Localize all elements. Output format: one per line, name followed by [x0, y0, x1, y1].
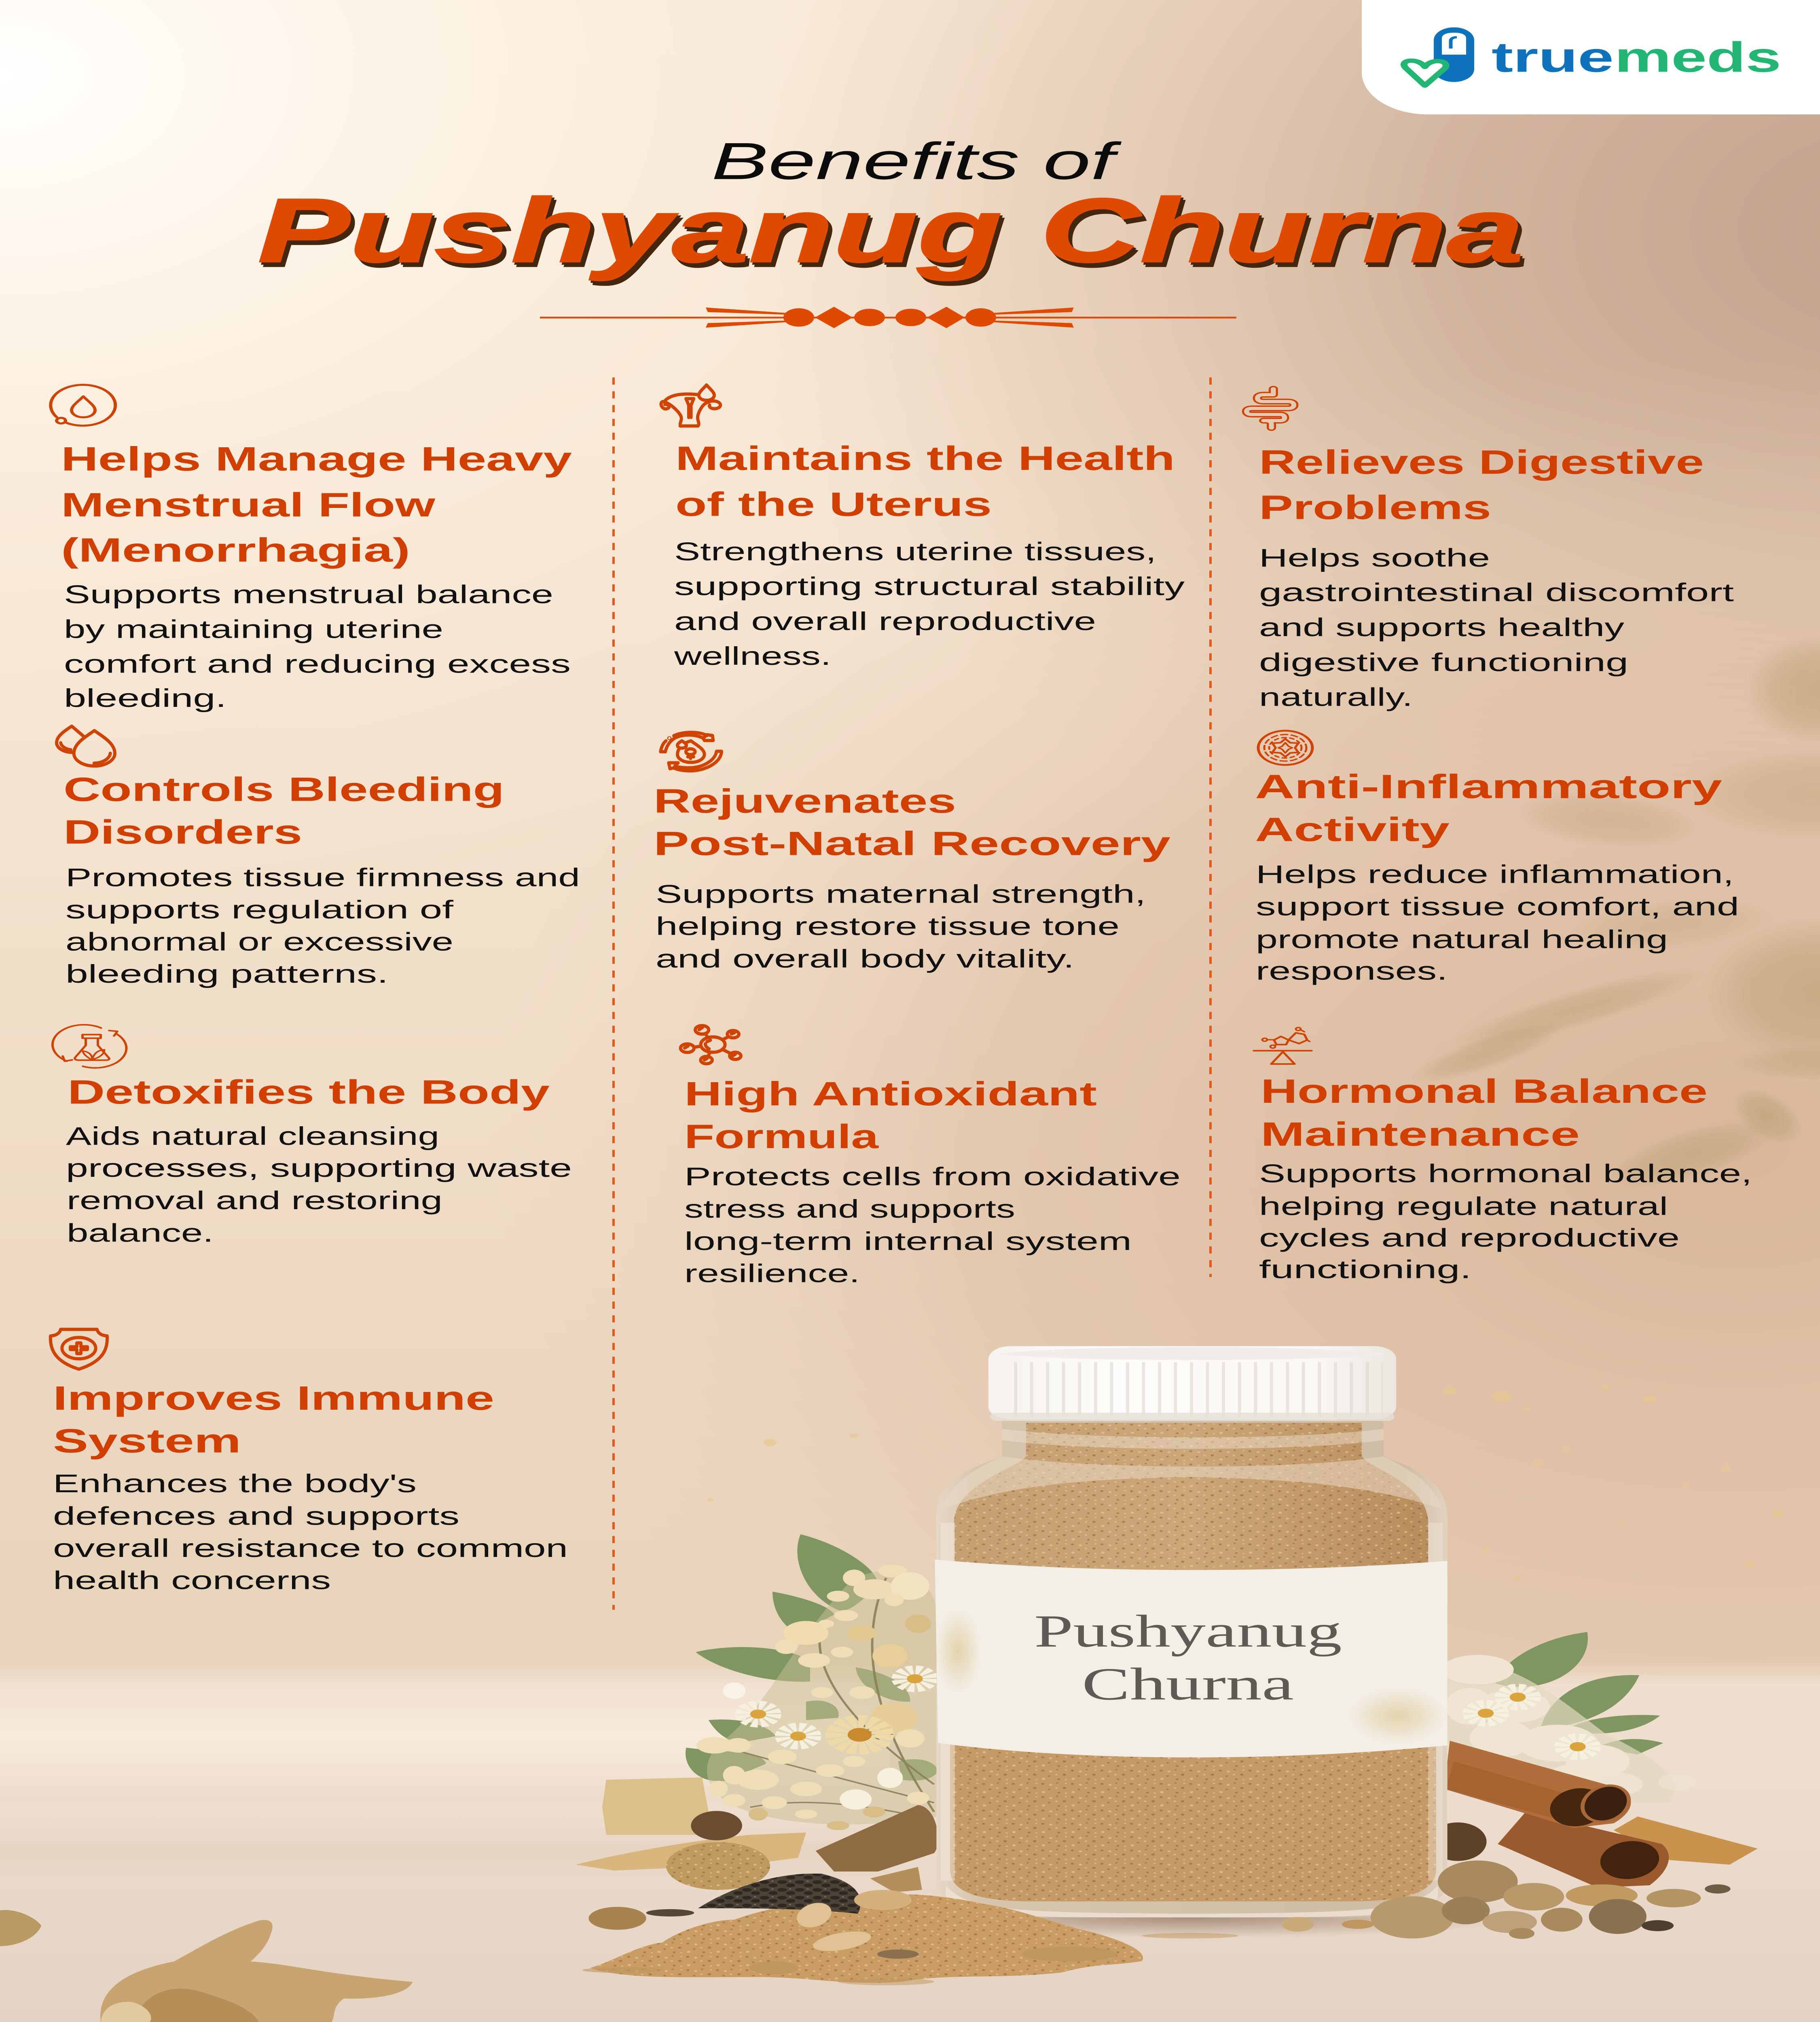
powder pile: [590, 1894, 1143, 1983]
product still life: [576, 1346, 1784, 1985]
icon: shield with cross: [51, 1329, 107, 1369]
text block: removal and restoring: [67, 1186, 442, 1214]
panel: Anti-Inflammatory Activity: [1255, 731, 1739, 985]
heading: [53, 1379, 494, 1460]
right bouquet: [1442, 1632, 1697, 1803]
text block: balance.: [67, 1218, 214, 1247]
text block: helping regulate natural: [1259, 1192, 1668, 1220]
upper powder: [954, 1423, 1428, 1578]
icon: mandala: [1258, 731, 1312, 765]
icon: intestines: [1246, 389, 1294, 428]
main title: Pushyanug Churna: [258, 180, 1524, 282]
column divider left: [612, 377, 615, 1610]
jar label text: Pushyanug: [1034, 1605, 1342, 1657]
icon: two drops: [57, 726, 115, 766]
icon: flask with leaf and arrows: [53, 1025, 126, 1068]
heading: [1255, 768, 1722, 848]
text block: and supports healthy: [1259, 613, 1624, 642]
text block: stress and supports: [684, 1195, 1015, 1223]
text block: defences and supports: [53, 1502, 459, 1530]
text block: Enhances the body's: [53, 1469, 417, 1498]
heading: [654, 783, 1170, 863]
panel: High Antioxidant Formula: [681, 1026, 1181, 1288]
text block: digestive functioning: [1259, 648, 1628, 677]
text block: support tissue comfort, and: [1256, 892, 1739, 921]
left bouquet: [686, 1534, 938, 1830]
wordmark: true: [1492, 34, 1614, 81]
heading: Helps Manage Heavy: [61, 440, 572, 478]
heading: Hormonal Balance: [1261, 1072, 1708, 1110]
text block: and overall reproductive: [674, 607, 1096, 636]
text block: abnormal or excessive: [66, 927, 453, 956]
heading: Improves Immune: [53, 1379, 494, 1417]
lower powder: [950, 1743, 1436, 1901]
heading: Activity: [1255, 811, 1450, 848]
panel: Relieves Digestive Problems: [1246, 389, 1734, 711]
glass highlights: [942, 1456, 1442, 1509]
scattered powder crumbs: [582, 1920, 1374, 1985]
text block: [1259, 543, 1734, 711]
icon: cycle with drop and female symbol: [660, 732, 722, 771]
main title: Pushyanug Churna: [260, 182, 1526, 284]
panel: Rejuvenates Post-Natal Recovery: [654, 732, 1170, 973]
text block: naturally.: [1259, 683, 1413, 711]
heading: Rejuvenates: [654, 783, 956, 820]
text block: Promotes tissue firmness and: [66, 863, 580, 892]
black seeds: [698, 1874, 861, 1914]
icon: molecule on balance: [1254, 1028, 1312, 1064]
glass jar: [935, 1346, 1448, 1917]
logo panel: [1362, 0, 1820, 114]
panel: Hormonal Balance Maintenance: [1254, 1028, 1752, 1284]
heading: [684, 1075, 1097, 1155]
heading: (Menorrhagia): [61, 531, 410, 569]
panel: Detoxifies the Body: [53, 1025, 572, 1247]
lid: [988, 1346, 1396, 1421]
text block: cycles and reproductive: [1259, 1223, 1680, 1252]
text block: Helps soothe: [1259, 543, 1490, 572]
text block: and overall body vitality.: [656, 944, 1074, 973]
wordmark: [1492, 34, 1781, 81]
jar shadow: [854, 1897, 1526, 1938]
text block: Supports maternal strength,: [656, 880, 1146, 908]
subtitle: Benefits of: [711, 132, 1122, 190]
left roots: [576, 1777, 938, 1892]
text block: Supports hormonal balance,: [1259, 1159, 1752, 1188]
front pieces right: [1282, 1861, 1731, 1939]
text block: [684, 1162, 1181, 1288]
heading: [61, 440, 572, 569]
text block: supporting structural stability: [674, 572, 1185, 601]
text block: [66, 863, 580, 988]
heading: of the Uterus: [675, 486, 992, 523]
text block: [656, 880, 1146, 973]
text block: long-term internal system: [684, 1227, 1132, 1255]
icon: capsule and heart: [1404, 27, 1474, 86]
text block: Supports menstrual balance: [64, 580, 553, 609]
wordmark: meds: [1615, 34, 1781, 81]
title: [258, 132, 1528, 286]
heading: [63, 771, 504, 851]
heading: Controls Bleeding: [63, 771, 504, 808]
text block: bleeding.: [64, 684, 226, 713]
main title: Pushyanug Churna: [262, 184, 1528, 286]
heading: Relieves Digestive: [1259, 444, 1704, 481]
cinnamon sticks: [1429, 1741, 1758, 1888]
panel: Improves Immune System: [51, 1329, 568, 1595]
text block: Aids natural cleansing: [66, 1122, 439, 1151]
icon: uterus with drop: [661, 385, 720, 426]
text block: [1259, 1159, 1752, 1284]
jar label text: [1034, 1605, 1342, 1709]
panel: Helps Manage Heavy Menstrual Flow: [51, 385, 572, 713]
text block: gastrointestinal discomfort: [1259, 578, 1734, 607]
text block: responses.: [1256, 956, 1448, 985]
text block: [66, 1122, 572, 1247]
text block: functioning.: [1259, 1255, 1471, 1284]
text block: processes, supporting waste: [66, 1154, 572, 1182]
heading: Maintains the Health: [675, 440, 1175, 477]
icon: drop in circle: [51, 385, 115, 426]
column divider right: [1209, 377, 1212, 1277]
heading: Menstrual Flow: [61, 486, 436, 524]
text block: bleeding patterns.: [66, 960, 388, 988]
text block: supports regulation of: [66, 895, 454, 924]
text block: Protects cells from oxidative: [684, 1162, 1181, 1191]
heading: Post-Natal Recovery: [654, 825, 1170, 863]
icon: molecule: [681, 1026, 741, 1064]
text block: [53, 1469, 568, 1595]
text block: [674, 537, 1185, 670]
label: [935, 1559, 1448, 1758]
heading: High Antioxidant: [684, 1075, 1097, 1113]
heading: Anti-Inflammatory: [1255, 768, 1722, 806]
heading: Detoxifies the Body: [68, 1073, 550, 1111]
text block: health concerns: [53, 1566, 331, 1595]
glass body: [936, 1421, 1448, 1917]
ornament divider: [540, 307, 1236, 328]
text block: resilience.: [684, 1259, 860, 1288]
text block: comfort and reducing excess: [64, 649, 571, 678]
text block: [1256, 860, 1739, 985]
left front nuts: [588, 1890, 919, 1959]
heading: [1261, 1072, 1708, 1153]
text block: overall resistance to common: [53, 1534, 568, 1563]
text block: helping restore tissue tone: [656, 912, 1120, 941]
text block: wellness.: [674, 642, 831, 670]
heading: [675, 440, 1175, 523]
heading: System: [53, 1422, 241, 1460]
text block: Helps reduce inflammation,: [1256, 860, 1734, 888]
jar label text: Churna: [1082, 1658, 1294, 1709]
panel: Maintains the Health of the Uterus: [661, 385, 1185, 670]
golden bokeh sparkles: [707, 1385, 1784, 1580]
label decoration: [935, 1610, 1446, 1743]
heading: [1259, 444, 1704, 526]
text block: promote natural healing: [1256, 925, 1668, 954]
text block: by maintaining uterine: [64, 615, 443, 643]
heading: Maintenance: [1261, 1115, 1580, 1153]
text block: [64, 580, 571, 713]
panel: Controls Bleeding Disorders: [57, 726, 580, 988]
heading: Disorders: [63, 813, 302, 851]
text block: Strengthens uterine tissues,: [674, 537, 1156, 566]
blurred foreground herb chunks: [0, 1910, 413, 2022]
blurred plant shadow on the right: [1399, 633, 1820, 1202]
heading: Formula: [684, 1118, 879, 1155]
heading: Problems: [1259, 489, 1491, 526]
